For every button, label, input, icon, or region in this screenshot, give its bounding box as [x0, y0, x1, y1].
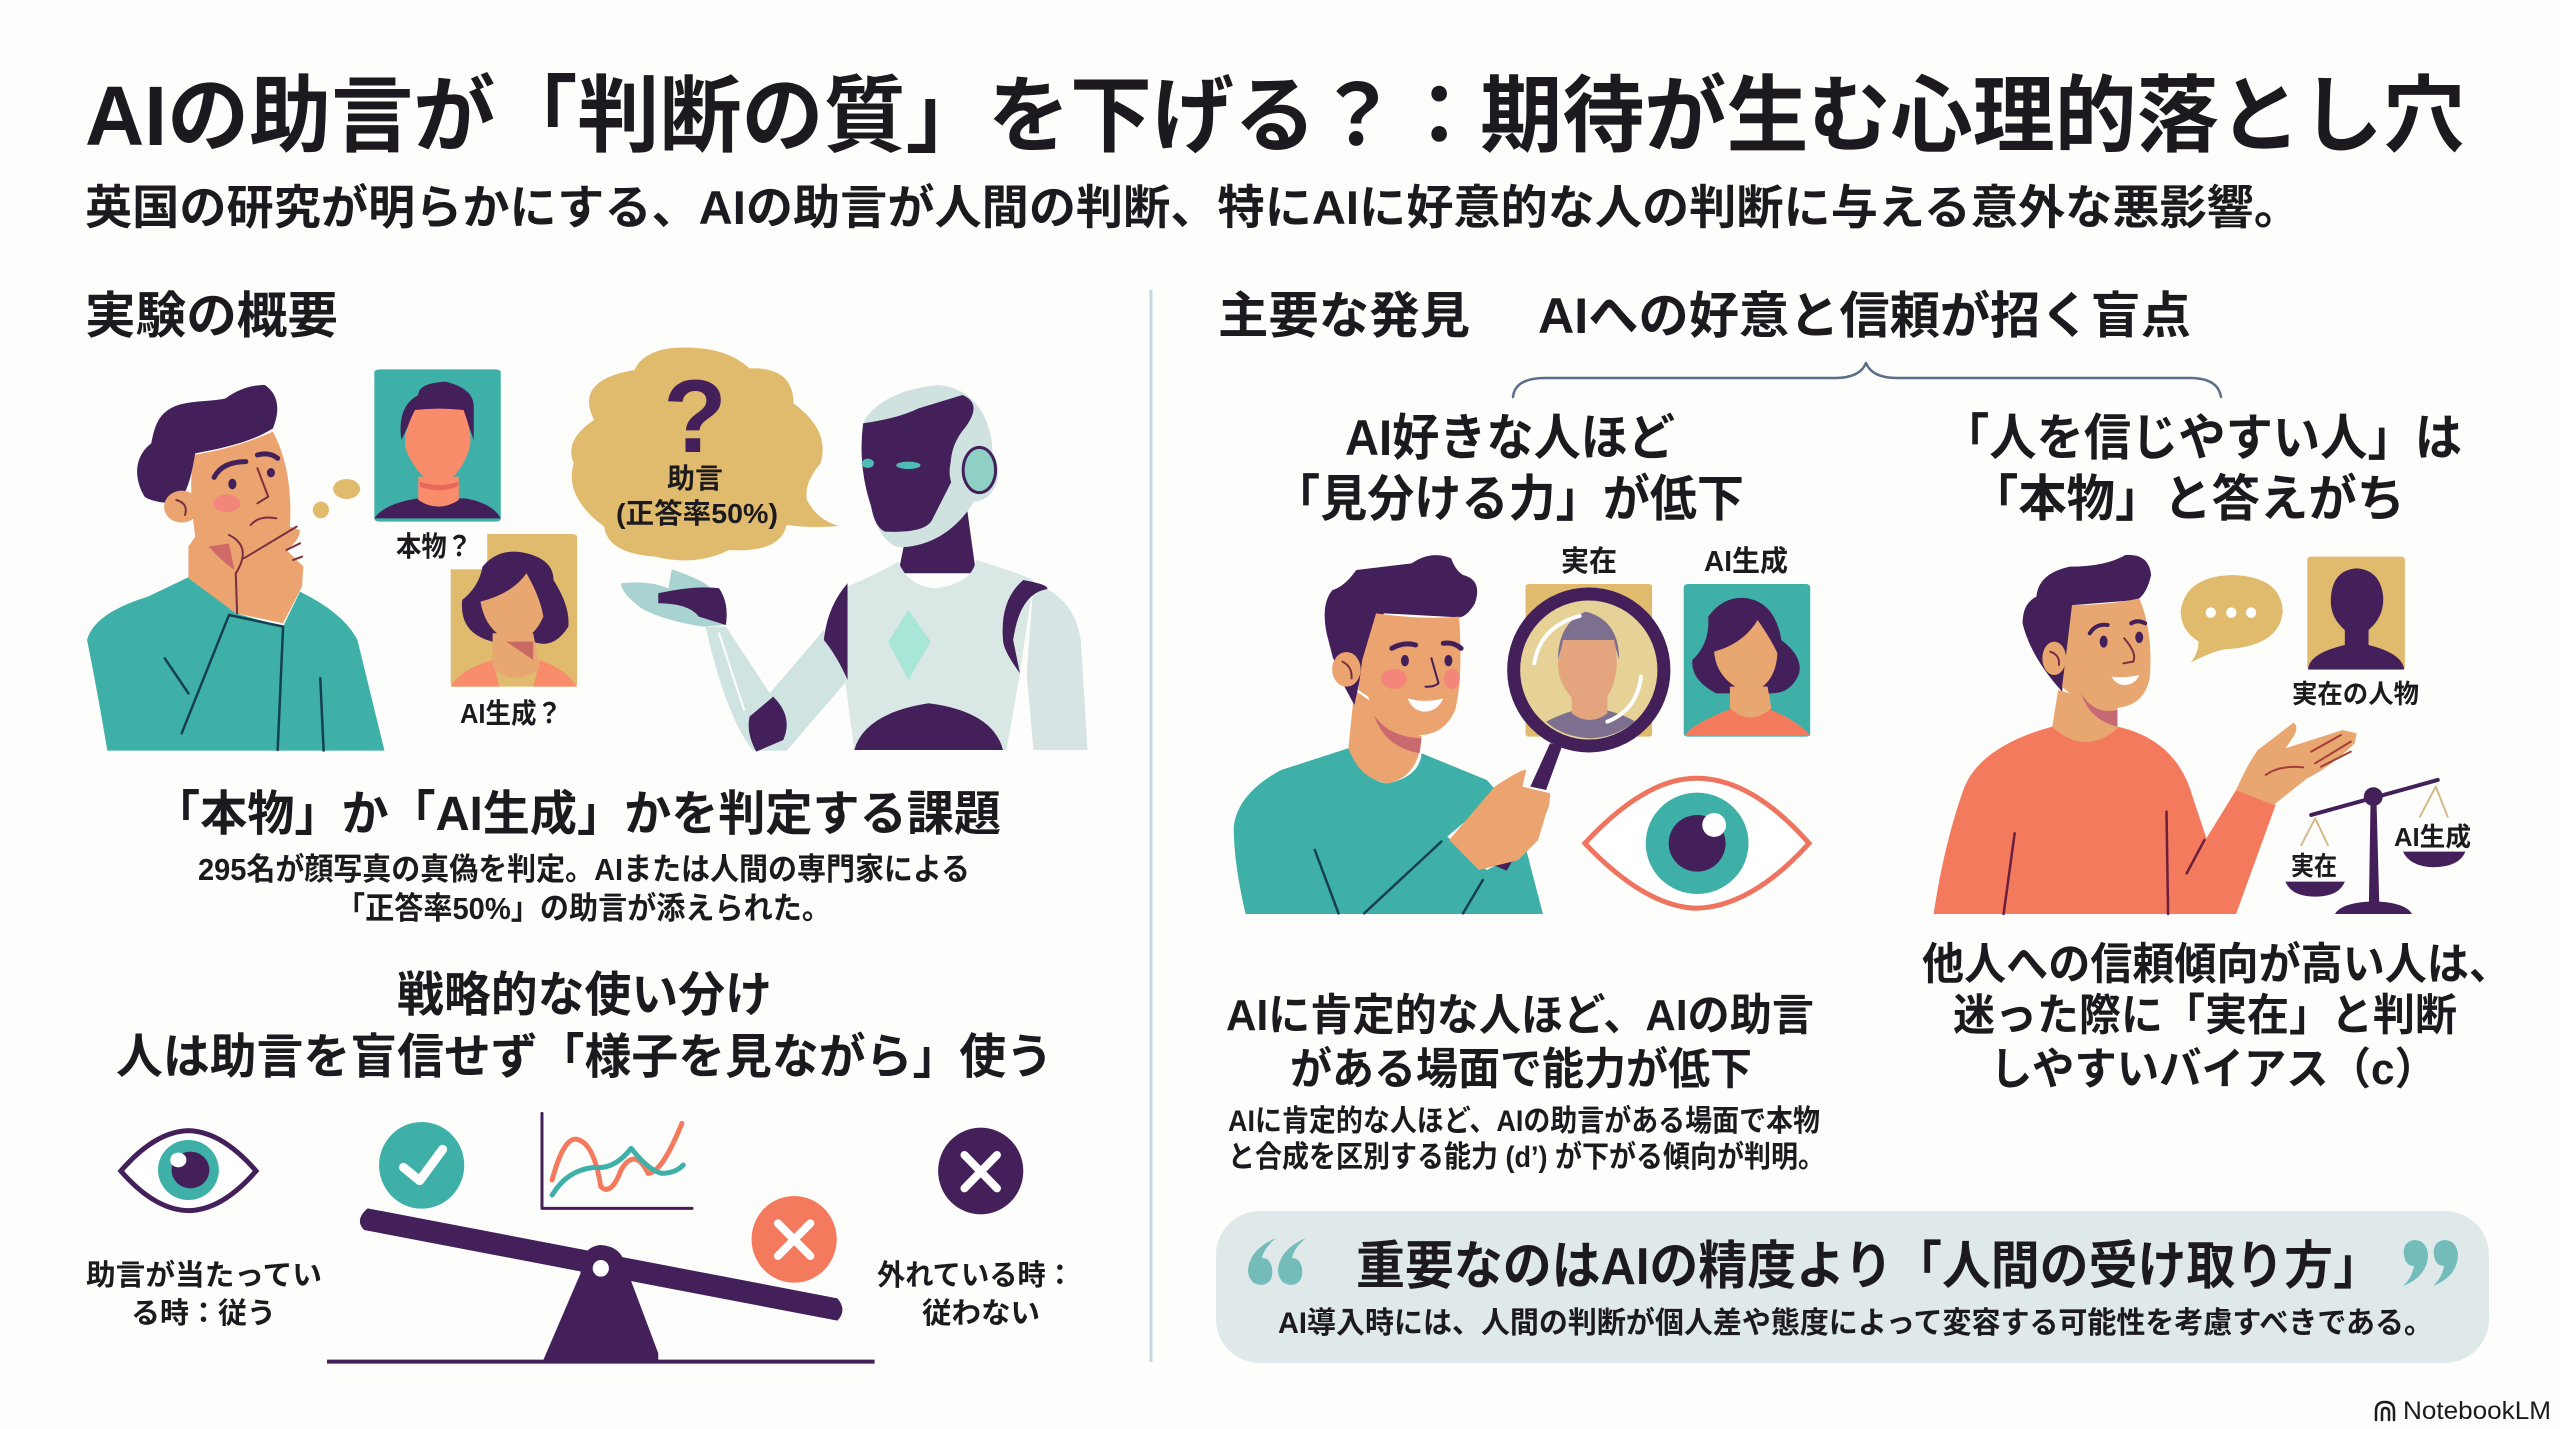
- heading: experiment overview: 実験の概要: [85, 288, 338, 344]
- logo: NotebookLM: NotebookLM: [2403, 1397, 2551, 1425]
- label: scale AI generated: AI生成: [2394, 822, 2471, 852]
- heading: AI fans lose discernment: AI好きな人ほど: [1345, 410, 1675, 466]
- heading: key message: 重要なのはAIの精度より「人間の受け取り方」: [1356, 1238, 2382, 1296]
- label: do not follow when wrong: 外れている時：: [877, 1259, 1074, 1292]
- text block: finding one: [1226, 991, 1825, 1174]
- illustration: seesaw balance: [327, 1208, 875, 1362]
- heading: strategic use: 人は助言を盲信せず「様子を見ながら」使う: [116, 1031, 1053, 1084]
- heading: task: 「本物」か「AI生成」かを判定する課題: [153, 788, 1001, 841]
- text block: finding two: 他人への信頼傾向が高い人は、: [1922, 940, 2511, 989]
- icon: coral cross: [752, 1196, 837, 1283]
- illustration: friendly man gesturing: [1934, 555, 2357, 914]
- text: key message detail: AI導入時には、人間の判断が個人差や態度によって変容する可能性を考慮すべきである。: [1278, 1306, 2433, 1340]
- illustration: thinking man: [87, 385, 384, 751]
- heading: trusting people answer real: 「人を信じやすい人」は: [1942, 410, 2462, 466]
- panel: experiment overview: [85, 288, 1088, 1362]
- label: follow when correct: 助言が当たってい: [86, 1258, 322, 1292]
- text block: task description: 295名が顔写真の真偽を判定。AIまたは人間の専門家による: [198, 852, 970, 887]
- icon: closing quote: [2403, 1240, 2458, 1286]
- speech bubble: advice 50 percent: ?: [663, 359, 727, 475]
- icon: tilted scale: [2286, 780, 2465, 914]
- heading: key findings: AIへの好意と信頼が招く盲点: [1538, 288, 2191, 344]
- heading: trusting people answer real: 「本物」と答えがち: [1970, 471, 2405, 527]
- label: do not follow when wrong: 従わない: [922, 1297, 1040, 1330]
- photo: AI generated woman: [1684, 584, 1810, 737]
- bracket linking two findings: [1513, 363, 2221, 397]
- label: AI generated?: AI生成？: [460, 698, 562, 729]
- text block: finding two: 迷った際に「実在」と判断: [1953, 991, 2457, 1040]
- label: do not follow when wrong: [877, 1259, 1074, 1330]
- text block: task description: [198, 852, 970, 926]
- heading: key findings: 主要な発見: [1218, 288, 1470, 344]
- divider between panels: [1150, 290, 1152, 1362]
- illustration: man with magnifying glass: [1234, 555, 1543, 914]
- label: real?: 本物？: [396, 531, 472, 562]
- panel: key findings: [1216, 288, 2511, 1363]
- label: AI generated: AI生成: [1704, 545, 1788, 578]
- photo: real person under magnifier: [1489, 584, 1664, 871]
- callout: key message: [1216, 1211, 2489, 1363]
- icon: purple cross: [938, 1128, 1023, 1214]
- heading: AI fans lose discernment: 「見分ける力」が低下: [1273, 471, 1744, 527]
- icon: coral outlined eye: [1585, 778, 1809, 908]
- text block: task description: 「正答率50%」の助言が添えられた。: [336, 891, 831, 926]
- icon: gold speech bubble: [2181, 575, 2283, 662]
- illustration: robot: [621, 385, 1088, 752]
- heading: key findings: [1218, 288, 2191, 344]
- text block: finding one: AIに肯定的な人ほど、AIの助言がある場面で本物: [1228, 1104, 1820, 1138]
- heading: strategic use: 戦略的な使い分け: [397, 969, 772, 1022]
- text block: finding two: しやすいバイアス（c）: [1990, 1045, 2437, 1094]
- label: scale real: 実在: [2291, 851, 2337, 881]
- heading: strategic use: [116, 969, 1053, 1084]
- speech bubble: advice 50 percent: [571, 347, 839, 560]
- heading: AI fans lose discernment: [1273, 410, 1744, 527]
- title: AIの助言が「判断の質」を下げる？：期待が生む心理的落とし穴: [85, 69, 2465, 163]
- photo: real person silhouette: [2307, 557, 2405, 670]
- text block: finding one: がある場面で能力が低下: [1290, 1045, 1752, 1094]
- label: real: 実在: [1561, 545, 1617, 578]
- label: follow when correct: る時：従う: [131, 1297, 276, 1330]
- speech bubble: advice 50 percent: (正答率50%): [616, 498, 778, 529]
- text block: finding one: と合成を区別する能力 (d’) が下がる傾向が判明。: [1228, 1140, 1825, 1174]
- text block: finding one: AIに肯定的な人ほど、AIの助言: [1226, 991, 1814, 1040]
- text block: finding two: [1922, 940, 2511, 1094]
- subtitle: 英国の研究が明らかにする、AIの助言が人間の判断、特にAIに好意的な人の判断に与える意外な悪影響。: [85, 181, 2301, 234]
- icon: opening quote: [1248, 1238, 1306, 1285]
- icon: watching eye: [121, 1131, 256, 1211]
- icon: check mark: [379, 1122, 464, 1209]
- chart: line chart icon: [542, 1113, 692, 1208]
- speech bubble: advice 50 percent: 助言: [667, 463, 723, 494]
- photo: AI generated woman portrait: [384, 530, 577, 687]
- hand holding magnifier: [1449, 770, 1550, 870]
- label: follow when correct: [86, 1258, 322, 1330]
- label: real person: 実在の人物: [2292, 679, 2419, 709]
- heading: trusting people answer real: [1942, 410, 2462, 527]
- photo: real man portrait: [374, 369, 501, 522]
